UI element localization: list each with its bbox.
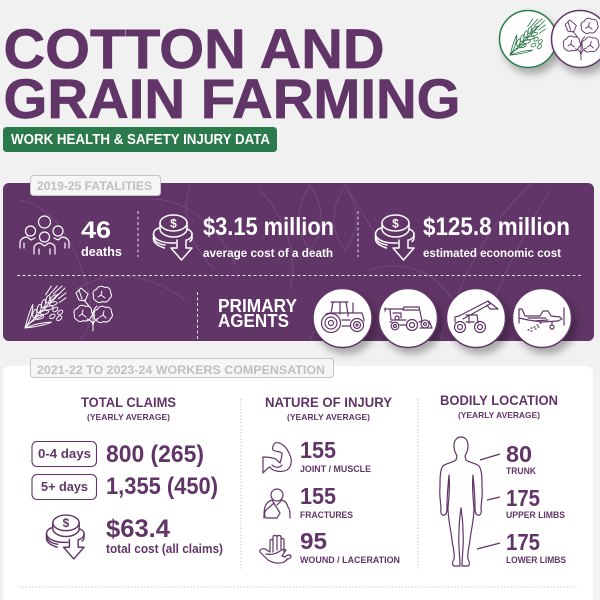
column: total claims — [32, 395, 223, 559]
0-4 days row — [32, 441, 204, 468]
stat: estimated economic cost: estimated economic cost — [423, 246, 561, 260]
stat: fractures: 155 — [300, 483, 336, 509]
stat: average cost of a death — [203, 213, 334, 260]
icon: grain — [25, 286, 66, 328]
background crop pattern — [20, 180, 550, 340]
stat: average cost of a death: average cost of a death — [203, 246, 333, 260]
stat: trunk — [506, 441, 536, 476]
stat: wound / laceration: WOUND / LACERATION — [300, 555, 400, 565]
panel: workers compensation — [3, 358, 593, 600]
primary agents heading: PRIMARY — [218, 296, 297, 316]
stat: average cost of a death: $3.15 million — [203, 213, 334, 241]
primary agents heading — [218, 296, 297, 331]
subtitle badge — [3, 127, 277, 152]
heading tab: 2019-25 FATALITIES — [37, 181, 152, 193]
title — [4, 17, 461, 130]
stat: deaths: deaths — [81, 244, 122, 259]
stat: lower limbs: LOWER LIMBS — [506, 555, 566, 565]
icon: body outline — [440, 437, 482, 566]
0-4 days row: 800 (265) — [106, 441, 204, 468]
icon: combine harvester — [378, 288, 438, 348]
icon: people — [20, 216, 69, 254]
stat: lower limbs — [506, 529, 566, 565]
bodily location heading: (YEARLY AVERAGE) — [458, 410, 540, 420]
icon: flexed arm — [263, 443, 291, 473]
icon: grain circle — [500, 10, 556, 68]
5+ days row: 5+ days — [41, 480, 88, 494]
column: nature of injury — [260, 395, 400, 565]
icon: coins with down arrow — [46, 515, 84, 559]
subtitle badge: WORK HEALTH & SAFETY INJURY DATA — [11, 132, 270, 148]
bodily location heading — [440, 393, 558, 420]
icon: coins with down arrow — [376, 215, 414, 260]
stat: joint / muscle: 155 — [300, 437, 336, 463]
nature of injury heading — [265, 395, 392, 422]
stat: fractures: FRACTURES — [300, 510, 353, 520]
stat: trunk: 80 — [506, 441, 532, 467]
icon: coins with down arrow — [154, 215, 192, 260]
icon: person with sling — [264, 489, 290, 518]
icon: wounded hand — [260, 536, 291, 563]
icon: telehandler — [446, 288, 506, 348]
stat: total cost: total cost (all claims) — [106, 542, 223, 556]
total claims heading: TOTAL CLAIMS — [81, 395, 176, 410]
nature of injury heading: NATURE OF INJURY — [265, 395, 392, 410]
stat: estimated economic cost — [423, 213, 570, 260]
heading tab — [30, 358, 334, 378]
leader lines — [477, 454, 500, 549]
5+ days row: 1,355 (450) — [106, 473, 218, 500]
title: COTTON AND — [4, 17, 384, 80]
icon: cotton circle — [552, 10, 600, 68]
stat: fractures — [300, 483, 353, 520]
stat: upper limbs: 175 — [506, 485, 540, 511]
total claims heading: (YEARLY AVERAGE) — [87, 412, 170, 422]
stat: trunk: TRUNK — [506, 466, 536, 476]
icon: coins with down arrow: $ — [392, 216, 399, 230]
stat: upper limbs — [506, 485, 565, 520]
icon: tractor — [313, 288, 372, 348]
total claims heading — [81, 395, 176, 422]
stat: joint / muscle — [300, 437, 371, 474]
stat: estimated economic cost: $125.8 million — [423, 213, 570, 241]
stat: deaths — [81, 217, 122, 259]
column: bodily location — [440, 393, 566, 566]
stat: total cost — [106, 515, 223, 556]
5+ days row — [32, 473, 218, 500]
stat: wound / laceration: 95 — [300, 528, 327, 554]
stat: lower limbs: 175 — [506, 529, 540, 555]
bodily location heading: BODILY LOCATION — [440, 393, 558, 408]
0-4 days row: 0-4 days — [38, 447, 91, 461]
icon: cotton — [74, 286, 112, 331]
icon: coins with down arrow: $ — [170, 216, 177, 230]
stat: joint / muscle: JOINT / MUSCLE — [300, 464, 371, 474]
stat: wound / laceration — [300, 528, 400, 565]
primary agents heading: AGENTS — [218, 311, 289, 331]
icon: crop duster plane — [512, 288, 572, 348]
stat: total cost: $63.4 — [106, 515, 170, 543]
stat: upper limbs: UPPER LIMBS — [506, 510, 565, 520]
stat: deaths: 46 — [81, 217, 111, 244]
heading tab: 2021-22 TO 2023-24 WORKERS COMPENSATION — [37, 365, 325, 377]
title: GRAIN FARMING — [4, 67, 461, 130]
nature of injury heading: (YEARLY AVERAGE) — [287, 412, 370, 422]
heading tab — [30, 176, 160, 196]
panel: 2019-25 fatalities — [3, 176, 594, 348]
icon: coins with down arrow: $ — [63, 516, 70, 530]
